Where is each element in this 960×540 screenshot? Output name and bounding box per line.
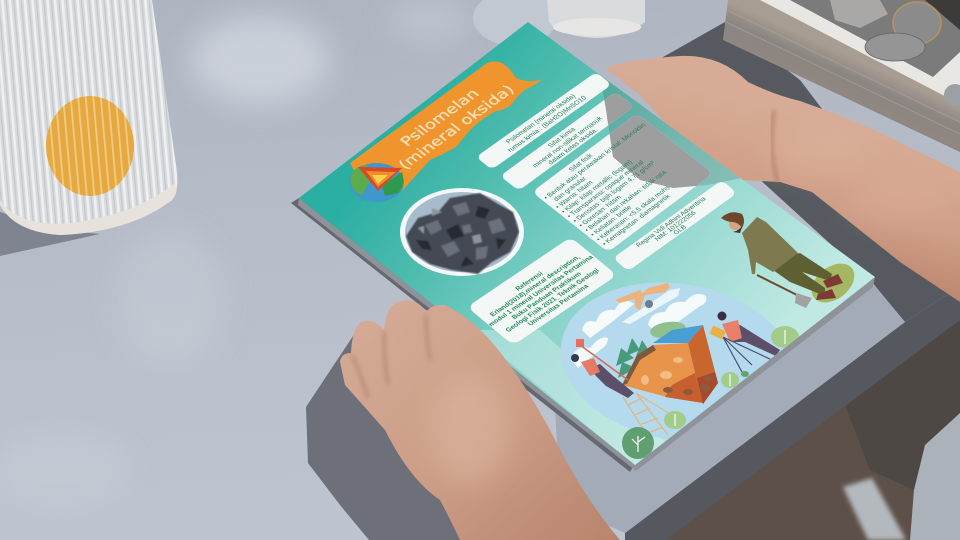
hair [721,212,744,228]
panel: physical properties: • Keliatan: brittle [589,204,634,238]
rocks in strata [663,375,712,395]
surveyor with pole [571,339,634,398]
trousers [773,253,832,296]
earth wedge right side [688,325,718,404]
forest [616,338,650,378]
panel: references: Referensi [514,271,545,292]
finger separations [352,314,430,398]
leaf badges [622,326,799,459]
geologist illustration [721,212,862,310]
table band in front of page [555,285,905,533]
sunlight patches on table [0,0,470,510]
panel: references [467,237,617,345]
panel: chemical properties: dalam kelas oksida. [547,127,600,166]
hand highlights [430,128,950,485]
ribbed glass jar [0,0,177,235]
shadow of jar [0,212,100,256]
shadow of left hand [306,333,470,540]
book stack with glasses [723,0,960,152]
panel: physical properties: dan granular [553,175,589,203]
panel: references: Geologi Fisik 2021_Teknik Geologi [504,268,601,334]
left hand [340,300,620,540]
poster page [299,22,875,465]
mineral rock photo [400,188,524,276]
title banner [350,62,542,200]
boots [823,274,843,288]
earth top water surface [653,325,703,343]
panel: author: GLB [672,224,688,236]
ground patch [804,256,862,310]
panel: physical properties: • Kilap: kilap metallic (logam) [560,159,634,215]
panel: physical properties: • Bentuk atau perawakan kristal: Monoklin [543,122,648,201]
coat [742,217,798,274]
panel: references: Buku Panduan Praktikum [511,271,583,321]
sky circle [561,282,787,440]
panel: chemical properties: Sifat kimia [547,126,577,149]
panel: formula: rumus kimia : (BaH2O)Mn5O10 [506,95,589,154]
panel: references: Universitas Pertamina [527,283,591,327]
panel: references: Erland(2018),mineral description, [489,254,582,318]
page shadow on table [291,198,640,472]
table shadow strip at right [640,22,960,322]
drone [615,283,670,310]
poster edge thickness [298,198,875,471]
panel: physical properties: • Goresan: hitam [578,194,623,229]
panel: chemical properties: mineral non-silikat termasuk [532,115,605,169]
earth wedge front [622,343,703,403]
pale corner of poster [470,330,665,465]
finger shadow on poster [600,76,742,188]
ladder [622,392,669,436]
clouds [571,288,706,368]
panel: physical properties: • Transparansi: opaque mineral [566,159,646,219]
panel: formula: Psilomelan (mineral oksida) [505,93,577,145]
panel: author: Regina Vidi Adhini Adventina [635,196,708,249]
panel: author: NIM: 101222056 [654,210,698,243]
lemon in jar [46,96,134,196]
panel: physical properties: • Belahan dan rekahan: tidak rata [584,169,669,233]
panel: physical properties [532,113,713,252]
title text: (mineral oksida) [396,83,518,173]
surveyor with tripod [710,312,780,372]
icon: earth core globe [349,163,404,202]
wrist crease [772,110,778,182]
panel: physical properties: • Densitas: bijih logam 4,71 g/cm³ [572,160,658,224]
panel: physical properties: • Kemagnetan: diamagnetik [601,193,673,247]
drinking glass [473,0,645,46]
earth survey illustration [561,282,799,459]
panel: physical properties: • Warna: hitam [554,179,595,210]
shovel [757,275,797,295]
lower-right table side and clothing [625,290,960,540]
panel: references: modul 1 mineral Universitas Pertamina [487,254,595,328]
title text: Psilomelan [398,87,483,150]
panel: chemical properties [500,92,634,191]
panel: physical properties: • Kekerasan: <5,5 skala mohs [595,185,672,243]
panel: author [613,180,737,272]
head and beard [729,218,741,230]
jar base [0,184,177,235]
right hand and forearm [605,56,960,302]
earth wedge red layer [665,373,703,403]
panel: physical properties: Sifat fisik [568,152,595,173]
panel: formula [476,72,612,170]
